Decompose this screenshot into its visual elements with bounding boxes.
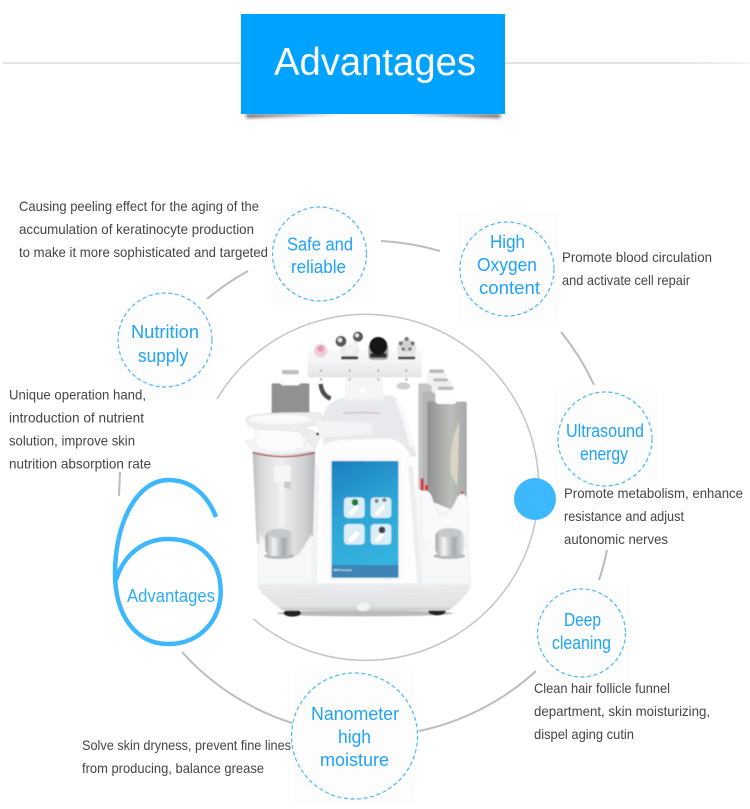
base body — [257, 497, 471, 611]
feature: nutrition supply: Nutrition — [131, 321, 199, 342]
knobs — [258, 528, 469, 583]
feature: safe and reliable — [270, 207, 370, 302]
description: safe and reliable: accumulation of keratinocyte production — [19, 221, 254, 237]
feature: ultrasound energy: energy — [580, 443, 629, 464]
handle: pink probe — [314, 344, 327, 357]
big numeral 6 badge — [115, 480, 221, 644]
description: nanometer high moisture: from producing, balance grease — [82, 760, 264, 776]
description: deep cleaning: Clean hair follicle funnel — [534, 680, 670, 696]
feature: nanometer high moisture — [292, 670, 418, 804]
description: safe and reliable: to make it more sophisticated and targeted — [19, 244, 268, 260]
feature: high oxygen content: content — [479, 277, 540, 298]
right bottle holder — [422, 491, 469, 563]
connector bar — [315, 421, 373, 437]
description: safe and reliable — [19, 198, 268, 260]
description: ultrasound energy: Promote metabolism, enhance — [564, 485, 743, 501]
title banner — [241, 14, 505, 118]
description: high oxygen content — [562, 249, 712, 288]
product photo: beauty machine — [245, 332, 471, 617]
feature: high oxygen content: High — [490, 231, 525, 252]
feature: nanometer high moisture: moisture — [320, 749, 389, 770]
big numeral 6 badge: Advantages — [127, 586, 215, 606]
screen icons — [344, 497, 391, 545]
description: nutrition supply: solution, improve skin — [9, 432, 135, 448]
feature: deep cleaning: Deep — [564, 609, 601, 630]
feature: safe and reliable: Safe and — [287, 234, 353, 254]
feature: nutrition supply — [118, 293, 212, 401]
touch screen: NW Function — [333, 568, 352, 572]
feature: high oxygen content: Oxygen — [477, 254, 537, 275]
feature: high oxygen content — [457, 212, 559, 322]
description: nanometer high moisture: Solve skin dryness, prevent fine lines — [82, 737, 291, 753]
machine shadow — [277, 610, 453, 616]
feature: nutrition supply: supply — [138, 345, 189, 366]
feature: nanometer high moisture: Nanometer — [311, 703, 399, 724]
description: nanometer high moisture — [82, 737, 291, 776]
feature: safe and reliable: reliable — [291, 256, 346, 277]
description: deep cleaning: dispel aging cutin — [534, 726, 634, 742]
description: nutrition supply: nutrition absorption rate — [9, 456, 151, 472]
hose — [321, 384, 331, 399]
handle: twin roller — [336, 332, 363, 360]
feature: nanometer high moisture: high — [338, 726, 371, 747]
description: ultrasound energy: autonomic nerves — [564, 531, 668, 547]
description: safe and reliable: Causing peeling effect for the aging of the — [19, 198, 259, 214]
description: deep cleaning — [534, 680, 710, 742]
feature: ultrasound energy: Ultrasound — [566, 420, 644, 441]
left bottle — [272, 370, 309, 414]
blue accent dot — [514, 478, 556, 520]
feature: ultrasound energy — [553, 390, 659, 486]
description: nutrition supply: introduction of nutrient — [9, 410, 144, 426]
rear housing — [323, 395, 417, 457]
header divider line — [3, 62, 750, 64]
connecting ring arcs — [119, 241, 607, 731]
feature: deep cleaning: cleaning — [552, 632, 611, 653]
title banner: Advantages — [274, 41, 476, 84]
feature: deep cleaning — [536, 584, 631, 682]
description: nutrition supply — [9, 386, 151, 472]
water cup — [245, 413, 324, 557]
description: ultrasound energy: resistance and adjust — [564, 508, 684, 524]
description: deep cleaning: department, skin moisturizing, — [534, 703, 710, 719]
inner circle around machine — [217, 314, 539, 660]
touch screen — [332, 461, 398, 578]
machine feet — [284, 608, 446, 617]
right bottles — [418, 369, 467, 515]
description: high oxygen content: Promote blood circulation — [562, 249, 712, 265]
description: high oxygen content: and activate cell repair — [562, 272, 690, 288]
accessory stand — [345, 375, 384, 400]
handle: black probe — [368, 337, 388, 360]
top panel — [308, 350, 422, 390]
description: ultrasound energy — [564, 485, 743, 547]
central tower — [312, 438, 422, 583]
handle: four-ball probe — [397, 337, 417, 359]
description: nutrition supply: Unique operation hand, — [9, 386, 146, 402]
